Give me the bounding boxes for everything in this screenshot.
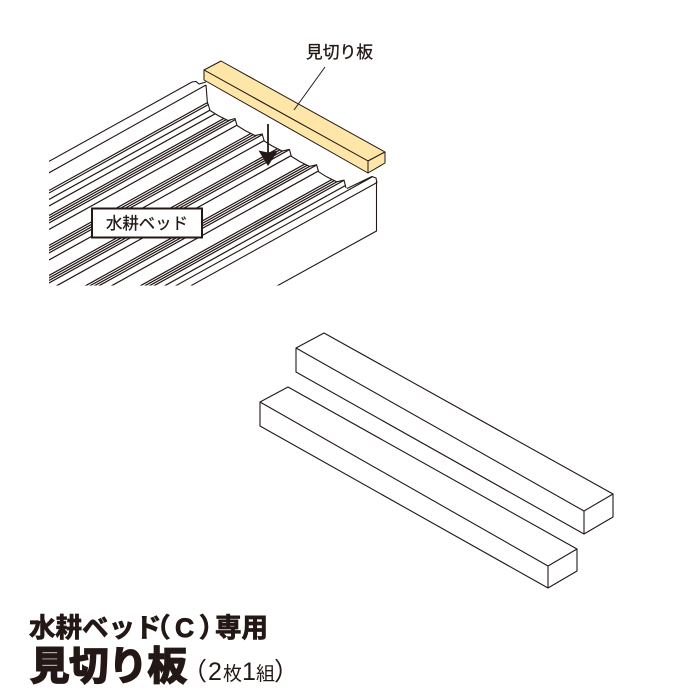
- label box: hydroponic bed: [92, 208, 202, 238]
- quantity note: 2: [208, 658, 222, 686]
- corrugated ridges: [49, 102, 345, 286]
- subtitle: ）: [199, 613, 226, 643]
- product title: [29, 613, 299, 689]
- subtitle: 専用: [215, 613, 268, 643]
- ridge ends: [208, 104, 346, 188]
- main title: 見切り板: [30, 645, 187, 689]
- partition board in yellow: [204, 61, 385, 173]
- lower partition board outline: [260, 387, 577, 588]
- hydroponic bed: [49, 80, 378, 286]
- quantity note: ）: [274, 658, 299, 686]
- quantity note: 組: [256, 663, 275, 685]
- label box: hydroponic bed: 水耕ベッド: [106, 215, 188, 233]
- label: partition board: 見切り板: [306, 43, 373, 62]
- arrow: [258, 124, 278, 166]
- far rim of bed: [49, 80, 208, 174]
- quantity note: 1: [242, 658, 256, 686]
- subtitle: （: [144, 613, 170, 643]
- subtitle: C: [175, 613, 194, 643]
- illustration: hydroponic bed with partition board: [49, 43, 386, 286]
- leader line: [294, 67, 325, 110]
- quantity note: （: [182, 658, 207, 686]
- near rim of bed: [175, 176, 378, 286]
- subtitle: 水耕ベッド: [29, 613, 162, 643]
- upper partition board outline: [296, 333, 613, 534]
- quantity note: 枚: [223, 663, 242, 685]
